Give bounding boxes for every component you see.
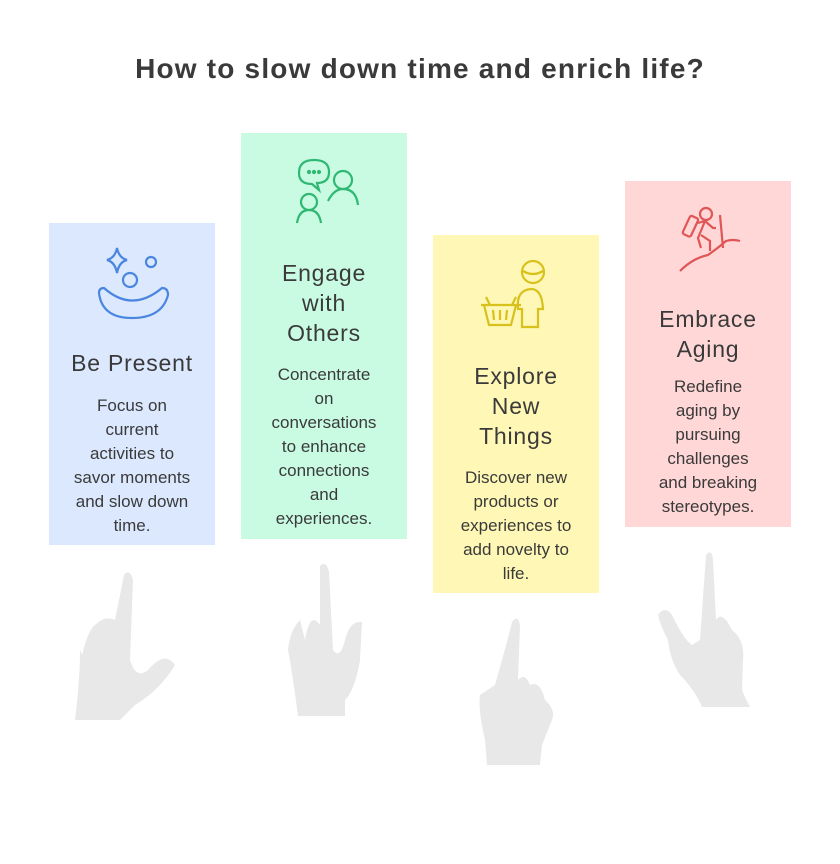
- heading: Aging: [677, 336, 739, 362]
- text: [461, 468, 571, 583]
- text: products or: [473, 492, 559, 511]
- panel: explore: [433, 235, 599, 593]
- text: experiences.: [276, 509, 372, 528]
- icon: people chat: [296, 158, 360, 224]
- text: Focus on: [97, 396, 167, 415]
- icon: basket person: [481, 260, 546, 328]
- text: conversations: [272, 413, 376, 432]
- text: [74, 396, 190, 535]
- text: add novelty to: [463, 540, 569, 559]
- text: and slow down: [76, 492, 188, 511]
- heading: with: [302, 290, 346, 316]
- text: aging by: [676, 401, 740, 420]
- text: Redefine: [674, 377, 742, 396]
- text: savor moments: [74, 468, 190, 487]
- heading: Others: [287, 320, 361, 346]
- heading: [282, 260, 366, 346]
- hand 1: [75, 572, 175, 720]
- panel: be present: [49, 223, 215, 545]
- heading: Things: [479, 423, 553, 449]
- text: experiences to: [461, 516, 571, 535]
- text: to enhance: [282, 437, 366, 456]
- text: Concentrate: [278, 365, 370, 384]
- icon: climber: [679, 206, 740, 272]
- text: [659, 377, 757, 516]
- panel: engage: [241, 133, 407, 539]
- heading: Engage: [282, 260, 366, 286]
- text: time.: [114, 516, 150, 535]
- text: on: [315, 389, 333, 408]
- hand 4: [658, 552, 750, 707]
- heading: Be Present: [71, 350, 193, 376]
- text: pursuing: [675, 425, 741, 444]
- heading: [474, 363, 558, 449]
- heading: Explore: [474, 363, 558, 389]
- hand 3: [480, 619, 553, 765]
- icon: sparkle smile: [98, 248, 170, 320]
- heading: [659, 306, 757, 362]
- text: stereotypes.: [662, 497, 754, 516]
- text: current: [106, 420, 158, 439]
- heading: New: [492, 393, 540, 419]
- text: and: [310, 485, 338, 504]
- text: [272, 365, 376, 528]
- text: and breaking: [659, 473, 757, 492]
- text: challenges: [667, 449, 749, 468]
- text: activities to: [90, 444, 174, 463]
- hand 2: [288, 564, 362, 716]
- text: connections: [279, 461, 369, 480]
- panel: aging: [625, 181, 791, 527]
- title: How to slow down time and enrich life?: [135, 53, 705, 84]
- text: Discover new: [465, 468, 567, 487]
- text: life.: [503, 564, 529, 583]
- heading: Embrace: [659, 306, 757, 332]
